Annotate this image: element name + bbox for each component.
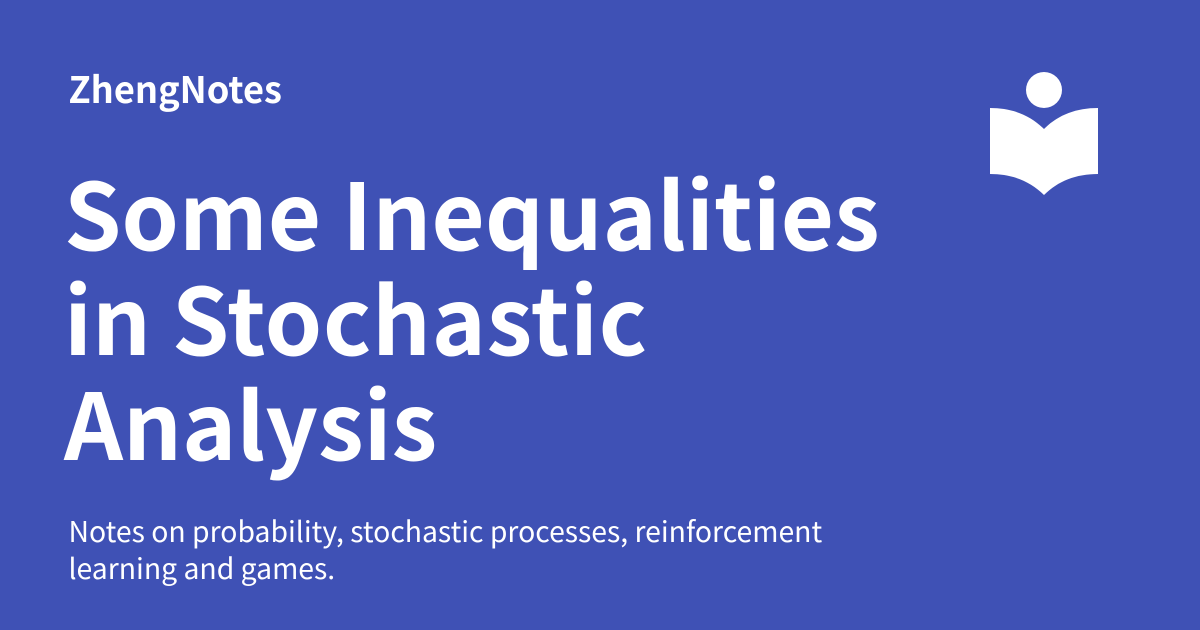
description (68, 510, 822, 588)
description: Notes on probability, stochastic processes, reinforcement (68, 510, 822, 551)
title (64, 144, 880, 486)
description: learning and games. (68, 547, 335, 588)
icon: reader with open book (990, 72, 1098, 195)
title: Analysis (64, 354, 437, 486)
title: in Stochastic (64, 248, 648, 382)
site name: ZhengNotes (68, 62, 282, 114)
title: Some Inequalities (64, 144, 880, 276)
